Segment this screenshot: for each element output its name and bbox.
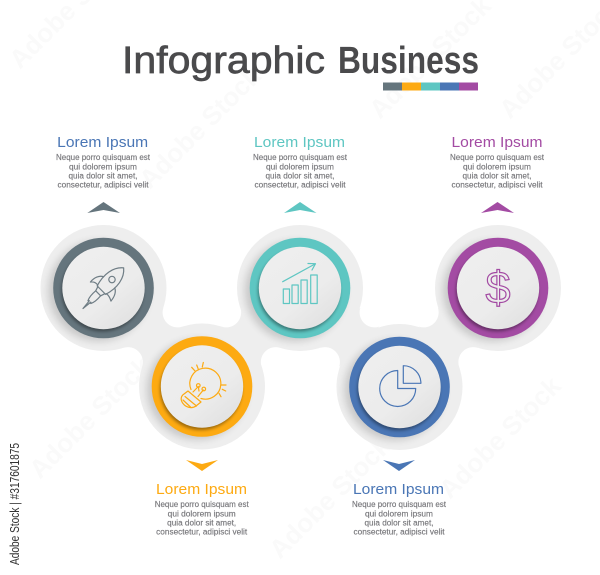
arrow: step 3 [284,202,316,213]
text block: step 1: quia dolor sit amet, [68,171,138,180]
watermark: Adobe Stock [133,60,267,194]
panel: step 2 bulb [147,336,252,440]
icon: dollar sign: $ [485,262,511,313]
text block: step 3 [253,135,348,189]
text block: step 2 [155,482,249,536]
text block: step 1: consectetur, adipisci velit [58,180,149,189]
text block: step 1: Lorem Ipsum [57,135,148,151]
text block: step 3: consectetur, adipisci velit [254,180,346,189]
text block: step 2: quia dolor sit amet, [167,518,236,527]
watermark: Adobe Stock [23,350,157,484]
watermark: Adobe Stock [263,430,397,564]
text block: step 5: consectetur, adipisci velit [452,180,543,189]
icon: light bulb [181,362,226,408]
stock id caption: Adobe Stock | #317601875 [8,443,22,565]
arrow: step 2 [186,460,218,471]
arrow: step 5 [481,202,514,213]
connected grey backdrop [40,225,561,450]
text block: step 4: quia dolor sit amet, [364,518,434,527]
text block: step 3: Lorem Ipsum [254,135,345,151]
text block: step 2: Lorem Ipsum [156,482,247,498]
panel: step 4 pie [344,337,450,440]
text block: step 1: Neque porro quisquam est [56,153,151,162]
text block: step 2: qui dolorem ipsum [168,509,236,518]
text block: step 4: consectetur, adipisci velit [354,527,445,536]
text block: step 1 [56,135,151,189]
text block: step 2: Neque porro quisquam est [155,500,249,509]
text block: step 4: qui dolorem ipsum [365,509,433,518]
panel: step 1 rocket [48,238,154,341]
title [122,40,479,82]
panel: step 3 chart [245,238,350,341]
text block: step 5: Neque porro quisquam est [450,153,545,162]
text block: step 3: qui dolorem ipsum [266,162,334,171]
title: Infographic [122,40,325,82]
panel: step 5 dollar [443,238,548,341]
arrow: step 4 [383,460,415,471]
text block: step 3: quia dolor sit amet, [266,171,334,180]
text block: step 4 [352,482,447,536]
title: Business [338,40,479,82]
text block: step 1: qui dolorem ipsum [69,162,137,171]
arrow: step 1 [87,202,120,213]
watermark: Adobe Stock [433,370,567,504]
text block: step 5: qui dolorem ipsum [463,162,531,171]
text block: step 5 [450,135,545,189]
icon: growth chart [283,264,317,304]
icon: rocket [73,258,134,319]
icon: pie chart [380,366,421,406]
text block: step 4: Lorem Ipsum [353,482,444,498]
text block: step 5: quia dolor sit amet, [462,171,532,180]
text block: step 5: Lorem Ipsum [452,135,542,151]
text block: step 3: Neque porro quisquam est [253,153,348,162]
text block: step 2: consectetur, adipisci velit [156,527,248,536]
text block: step 4: Neque porro quisquam est [352,500,447,509]
colour bar [383,82,478,90]
